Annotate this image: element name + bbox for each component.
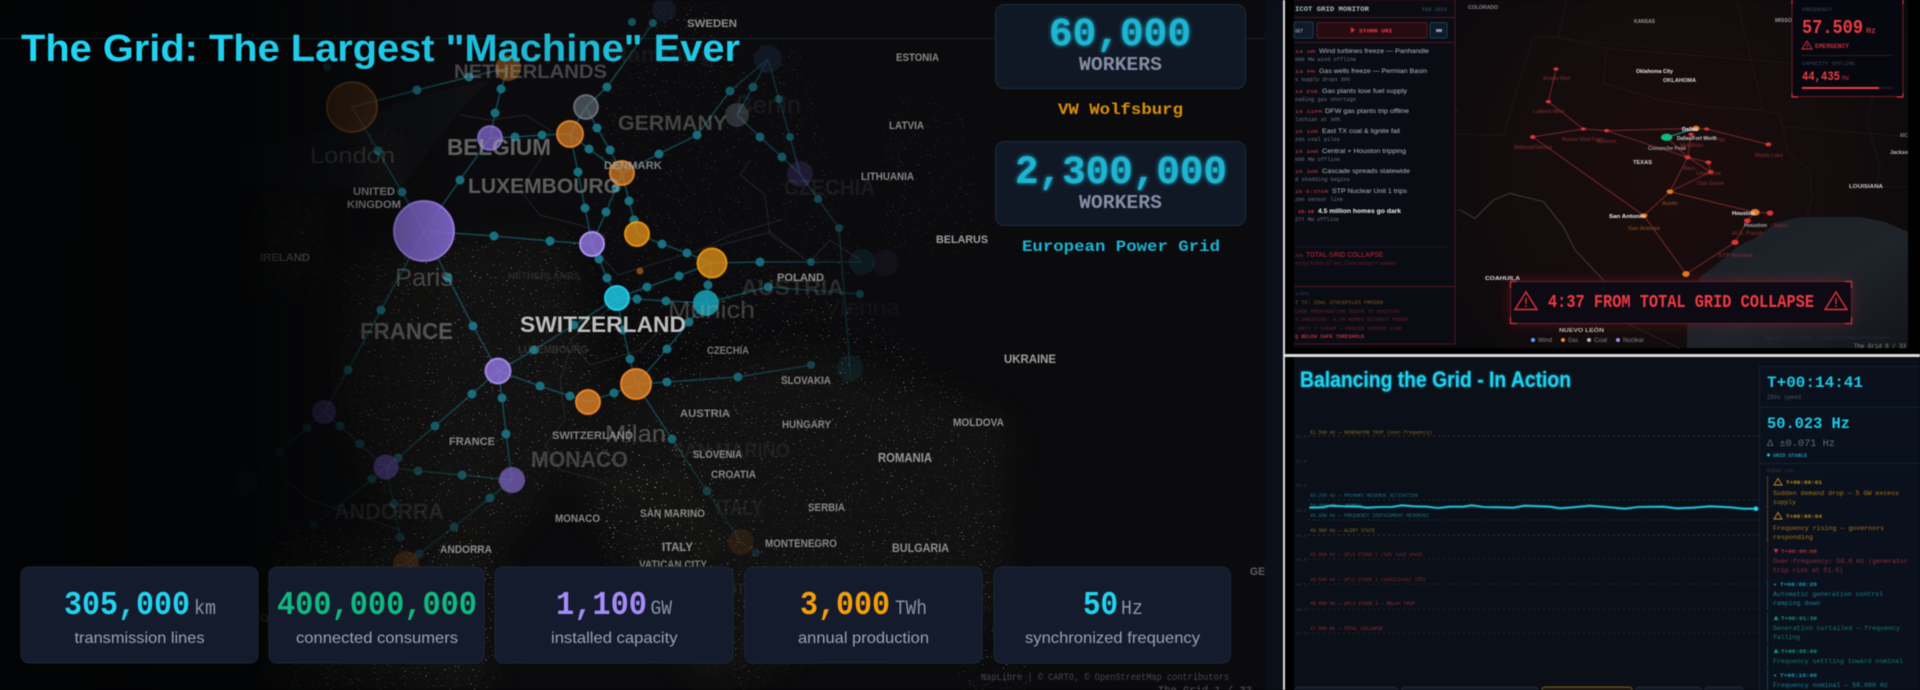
frequency deviation: Δ ±0.071 Hz — [1767, 438, 1835, 450]
map place labels: CZECHIA — [707, 345, 749, 357]
page counter: The Grid 6 / 33 — [1854, 343, 1906, 350]
title: The Grid: The Largest "Machine" Ever — [21, 28, 740, 70]
map place labels: ANDORRA — [440, 544, 492, 556]
event: frequency settling: Frequency settling toward nominal — [1773, 658, 1903, 665]
map labels: Houston — [1732, 211, 1756, 217]
label: workers: WORKERS — [1079, 54, 1162, 76]
map borders — [285, 115, 860, 530]
event log: EVENT LOG — [1767, 468, 1794, 474]
number: 2,300,000: 2,300,000 — [1015, 151, 1227, 196]
map place labels: SWEDEN — [687, 18, 737, 30]
frequency value: 57.509 — [1802, 17, 1863, 39]
attribution: MapLibre | © CARTO, © OpenStreetMap contributors — [1765, 334, 1890, 341]
stat card: connected consumers — [269, 567, 484, 663]
map water shading — [240, 80, 730, 560]
map labels: Oklahoma City — [1636, 69, 1674, 75]
event list: 4.5 million homes go dark — [1318, 208, 1401, 215]
threshold labels: 50.200 Hz — PRIMARY RESERVE ACTIVATION — [1310, 493, 1418, 499]
caption: European Power Grid: European Power Grid — [1022, 238, 1220, 256]
threshold labels: 49.500 Hz — ALERT STATE — [1310, 528, 1375, 534]
map place labels: ROMANIA — [878, 450, 933, 465]
map place labels: GERMANY — [618, 112, 727, 135]
event: over-frequency: trip risk at 51.5) — [1773, 567, 1843, 574]
legend: Coal — [1594, 338, 1607, 344]
grid status: GRID STABLE — [1773, 453, 1808, 459]
storm uri button: STORM URI — [1359, 28, 1393, 34]
skip button — [1430, 22, 1447, 38]
map place labels: CZECHIA — [784, 175, 875, 200]
caption: VW Wolfsburg: VW Wolfsburg — [1058, 101, 1183, 119]
sidebar system log: Q BELOW SAFE THRESHOLD — [1295, 334, 1364, 340]
plant labels: rgy — [1718, 137, 1725, 143]
event: AGC ramping: T+00:00:20 — [1780, 581, 1818, 588]
frequency trace — [1309, 505, 1758, 511]
axis labels: 49.0 — [1296, 557, 1307, 563]
event: demand drop: T+00:00:01 — [1786, 479, 1823, 486]
transmission network — [246, 18, 864, 579]
stat card: synchronized frequency — [994, 567, 1230, 663]
plant labels: r Bayou — [1771, 223, 1788, 229]
hub: Paris nuclear — [394, 201, 454, 261]
plant labels: STP Nuclear — [1718, 253, 1753, 259]
event: frequency rising — [1767, 510, 1884, 543]
night lights glow — [250, 130, 1010, 690]
event: frequency rising: responding — [1773, 534, 1813, 541]
threshold labels: 49.800 Hz — FREQUENCY CONTAINMENT RESERVES — [1310, 513, 1429, 519]
event list: 15 2AM — [1295, 149, 1318, 155]
plant labels: Limestone — [1696, 171, 1721, 177]
icon: warning left — [1515, 292, 1537, 310]
plant labels: Amarillo Wind — [1543, 76, 1570, 82]
map place labels: Vienna — [824, 295, 901, 320]
event: over-frequency: Over-frequency: 50.6 Hz (generator — [1773, 558, 1908, 565]
event: generation curtailed: falling — [1773, 634, 1800, 641]
event list: East TX coal & lignite fail — [1322, 128, 1401, 135]
event: frequency nominal: Frequency nominal — 50.000 Hz — [1773, 682, 1888, 689]
stat card: annual production: TWh — [895, 598, 927, 621]
event: AGC ramping: Automatic generation control — [1773, 591, 1883, 598]
map place labels: AUSTRIA — [680, 408, 730, 420]
sidebar system log — [1295, 292, 1408, 340]
map place labels: UNITED — [353, 186, 395, 198]
event: frequency rising: T+00:00:04 — [1786, 513, 1823, 520]
stat card: connected consumers: connected consumers — [296, 630, 458, 647]
map place labels: SLOVAKIA — [781, 375, 831, 387]
stat card: annual production: annual production — [798, 630, 929, 647]
panel: frequency readout: FREQUENCY — [1802, 7, 1832, 13]
event list: Wind turbines freeze — Panhandle — [1319, 48, 1429, 55]
map labels: MC — [1900, 133, 1908, 139]
bottom controls — [1295, 687, 1743, 690]
event list: zen sensor line — [1295, 197, 1343, 203]
sidebar system log: D SHEDDING: 4.5M HOMES WITHOUT POWER — [1295, 317, 1408, 323]
collapse event: ed by 4 min 37 sec. Cold restart = weeks. — [1295, 261, 1397, 267]
event log — [1767, 468, 1908, 690]
event: frequency settling — [1767, 645, 1903, 668]
map labels: Dallas/Fort Worth — [1677, 136, 1718, 142]
map place labels: Munich — [668, 297, 755, 324]
event list: 000 MW wind offline — [1295, 57, 1356, 63]
event list: DFW gas plants trip offline — [1325, 108, 1409, 115]
speed: 290x speed — [1767, 394, 1801, 401]
sidebar system log: CADE PROPAGATING SOUTH TO HOUSTON — [1295, 309, 1399, 315]
panel: European grid map — [0, 0, 1283, 690]
panel: frequency readout: CAPACITY OFFLINE — [1802, 61, 1855, 67]
stat card: synchronized frequency: Hz — [1121, 598, 1143, 621]
map place labels: FRANCE — [360, 318, 453, 344]
legend: Wind — [1538, 338, 1552, 344]
map place labels: IRELAND — [260, 252, 310, 264]
map labels: MISSO — [1775, 18, 1793, 24]
legend — [1531, 338, 1644, 344]
map place labels: Hamburg — [610, 42, 715, 67]
event list: STP Nuclear Unit 1 trips — [1332, 188, 1408, 195]
plant labels: Abilene — [1597, 139, 1616, 145]
sidebar system log: LOG — [1295, 292, 1310, 297]
corner brackets — [1792, 0, 1903, 97]
event list: 000 MW offline — [1295, 157, 1340, 163]
event list: 14 11PM — [1295, 109, 1322, 115]
panel: frequency readout: MW — [1842, 75, 1849, 82]
sidebar date: FEB 2021 — [1422, 7, 1447, 13]
panel: ERCOT grid monitor sidebar — [1294, 0, 1455, 344]
axis labels — [1296, 434, 1307, 637]
event list: 15-18 — [1298, 209, 1314, 215]
map place labels: LUXEMBOURG — [518, 344, 588, 356]
map place labels: VATICAN CITY — [639, 559, 708, 571]
event list — [1295, 48, 1429, 223]
panel: frequency readout — [1792, 0, 1903, 97]
offline capacity value: 44,435 — [1802, 70, 1840, 84]
ERCOT transmission network — [1530, 67, 1773, 277]
map labels: Houston — [1744, 223, 1768, 229]
map labels: Dallas — [1682, 127, 1698, 133]
map place labels: NETHERLANDS — [454, 62, 607, 83]
map place labels: BELARUS — [936, 234, 988, 246]
map labels: Comanche Peak — [1648, 146, 1687, 152]
stat card: transmission lines: transmission lines — [74, 630, 204, 647]
threshold labels: 47.500 Hz — TOTAL COLLAPSE — [1310, 626, 1383, 632]
stat card: annual production — [745, 567, 982, 663]
panel dividers — [1283, 0, 1920, 690]
title rule — [0, 38, 1265, 39]
night lights dots — [250, 0, 1040, 690]
stat card: installed capacity: installed capacity — [551, 630, 678, 647]
threshold labels: 48.000 Hz — UFLS STAGE 3 — RELAY TRIP — [1310, 601, 1415, 607]
event list: lothian at 30% — [1295, 117, 1340, 123]
plant labels: Martin Lake — [1755, 153, 1783, 159]
banner text: 4:37 FROM TOTAL GRID COLLAPSE — [1548, 293, 1814, 313]
map labels: TEXAS — [1633, 160, 1652, 166]
stat card: synchronized frequency: 50 — [1083, 587, 1118, 624]
plant labels: Midlothian — [1680, 143, 1703, 149]
panel: Texas grid collapse map — [1294, 0, 1909, 350]
map place labels: MONACO — [555, 513, 600, 525]
map labels: KANSAS — [1634, 19, 1655, 25]
map place labels: MOLDOVA — [953, 417, 1004, 429]
map labels: OKLAHOMA — [1663, 78, 1696, 84]
stat card: installed capacity — [495, 567, 733, 663]
event: frequency nominal — [1767, 669, 1888, 690]
number: 60,000: 60,000 — [1049, 13, 1191, 58]
map place labels: KINGDOM — [347, 199, 401, 211]
event list: Central + Houston tripping — [1322, 148, 1406, 155]
power lines — [1533, 69, 1770, 274]
collapse event — [1295, 252, 1397, 267]
map labels: NUEVO LEÓN — [1559, 326, 1604, 334]
stat card: connected consumers: 400,000,000 — [277, 587, 477, 624]
map place labels: Paris — [395, 264, 453, 292]
threshold labels: 51.500 Hz — GENERATOR TRIP (over-frequency) — [1310, 430, 1432, 436]
panel: balancing the grid — [1294, 357, 1920, 690]
map labels: San Antonio — [1609, 214, 1646, 220]
cyan active tie — [1667, 128, 1696, 137]
stat card: installed capacity: 1,100 — [556, 587, 647, 624]
map place labels: MONACO — [531, 447, 628, 472]
reset button: SET — [1295, 28, 1304, 34]
reset button — [1294, 22, 1313, 38]
attribution: MapLibre | © CARTO, © OpenStreetMap contributors — [981, 672, 1229, 684]
event: demand drop: Sudden demand drop — 5 GW excess — [1773, 490, 1899, 497]
stat card: transmission lines: 305,000 — [64, 587, 190, 624]
left fog overlay — [0, 0, 1265, 690]
event list: Gas wells freeze — Permian Basin — [1319, 68, 1427, 75]
map place labels: SWITZERLAND — [552, 430, 633, 442]
event list: 15 1AM — [1295, 129, 1318, 135]
threshold labels — [1310, 430, 1432, 632]
plant labels: Lubbock Wind — [1533, 109, 1564, 115]
event: frequency rising: Frequency rising — governors — [1773, 525, 1884, 532]
emergency status: EMERGENCY — [1815, 43, 1849, 50]
stat card: installed capacity: GW — [650, 598, 672, 621]
axis labels: 47.5 — [1296, 631, 1307, 637]
heading: Balancing the Grid - In Action — [1300, 367, 1571, 392]
event list: oading gas shortage — [1295, 97, 1356, 103]
callout: collapse countdown banner — [1510, 281, 1852, 324]
map labels: Jackso — [1890, 150, 1909, 156]
collapse event: AM — [1295, 253, 1303, 259]
sidebar system log: UNIT 1 SCRAM — FROZEN SENSOR LINE — [1298, 326, 1402, 332]
event: demand drop: supply — [1773, 499, 1796, 506]
axis labels: 48.0 — [1296, 607, 1307, 613]
substation nodes — [276, 18, 864, 579]
map place labels: Rome — [707, 575, 760, 600]
map place labels: Milan — [605, 421, 666, 448]
map place labels: MONTENEGRO — [765, 538, 837, 550]
event: frequency nominal: T+00:10:00 — [1780, 672, 1818, 679]
event: AGC ramping — [1767, 578, 1883, 610]
live frequency: 50.023 Hz — [1767, 415, 1850, 433]
panel: European grid workers comparison — [996, 142, 1246, 256]
hub: London gas — [327, 82, 377, 132]
map place labels: UKRAINE — [1004, 352, 1056, 366]
map place labels: BULGARIA — [892, 541, 949, 555]
card: 60,000 workers — [996, 4, 1246, 88]
map place labels: LITHUANIA — [861, 171, 914, 183]
map labels: LOUISIANA — [1849, 184, 1883, 190]
event: generation curtailed: Generation curtailed — frequency — [1773, 625, 1900, 632]
map place labels: NETHERLANDS — [508, 271, 580, 281]
map place labels: LUXEMBOURG — [468, 175, 620, 198]
stat card: transmission lines — [21, 567, 258, 663]
event: AGC ramping: ramping down — [1773, 600, 1820, 607]
event list: 277 MW offline — [1295, 217, 1339, 223]
map place labels: ITALY — [716, 495, 763, 520]
axis labels: 50.0 — [1296, 508, 1307, 514]
legend: Nuclear — [1623, 338, 1644, 344]
map place labels: HUNGARY — [782, 419, 832, 431]
event: frequency settling: T+00:05:00 — [1781, 648, 1818, 655]
sidebar system log: T TX: COAL STOCKPILES FROZEN — [1295, 300, 1383, 306]
event list: 15 3AM — [1295, 169, 1318, 175]
map labels: COAHUILA — [1485, 276, 1520, 282]
plant labels: San Antonio — [1628, 226, 1660, 232]
map place labels: London — [310, 143, 395, 168]
map place labels: ANDORRA — [334, 499, 444, 524]
map place labels: Berlin — [736, 92, 801, 119]
frequency chart — [1296, 430, 1760, 637]
event list: Gas plants lose fuel supply — [1322, 88, 1408, 95]
map place labels: SWITZERLAND — [520, 312, 686, 337]
storm uri button — [1317, 22, 1427, 38]
map place labels: SLOVENIA — [693, 449, 742, 461]
stat card: annual production: 3,000 — [800, 587, 890, 624]
map place labels: ITALY — [662, 540, 693, 554]
panel: simulation sidebar — [1760, 366, 1920, 690]
map place labels: GE — [1250, 566, 1265, 578]
axis labels: 51.0 — [1296, 459, 1307, 465]
power plant hubs — [234, 0, 898, 577]
plant labels: Austin — [1662, 201, 1678, 207]
map labels — [1468, 5, 1909, 334]
plant labels — [1514, 76, 1788, 259]
event list: s supply drops 50% — [1295, 77, 1350, 83]
transmission lines — [312, 26, 862, 566]
state borders and rivers — [1353, 0, 1908, 348]
map place labels: ESTONIA — [896, 52, 939, 64]
threshold lines — [1308, 436, 1760, 633]
axis labels: 48.5 — [1296, 582, 1307, 588]
map place labels: SERBIA — [808, 502, 845, 514]
gulf of Mexico — [1687, 217, 1908, 348]
stat card: synchronized frequency: synchronized frequency — [1025, 630, 1200, 647]
map place labels: FRANCE — [449, 436, 495, 448]
plant labels: Roscoe Wind Farm — [1562, 137, 1603, 143]
event list: 14 EVE — [1295, 89, 1318, 95]
legend: Gas — [1568, 338, 1578, 344]
plant labels: Midland/Odessa — [1514, 145, 1552, 151]
icon: warning — [1802, 41, 1812, 49]
map place labels: CROATIA — [711, 469, 756, 481]
event list: 14 AM — [1295, 49, 1315, 55]
event list: d shedding begins — [1295, 177, 1350, 183]
event: generation curtailed: T+00:01:30 — [1781, 615, 1818, 622]
map labels: COLORADO — [1468, 5, 1499, 11]
map place labels: O — [260, 613, 269, 625]
collapse event: TOTAL GRID COLLAPSE — [1306, 252, 1383, 259]
event: over-frequency: T+00:00:08 — [1781, 548, 1818, 555]
capacity bar — [1802, 87, 1893, 89]
stat card: transmission lines: km — [194, 598, 216, 621]
event: over-frequency — [1767, 545, 1908, 577]
event list: 14 PM — [1295, 69, 1315, 75]
event: generation curtailed — [1767, 612, 1900, 643]
plant labels: W.A. Parish — [1732, 231, 1763, 237]
active green plant — [1661, 134, 1672, 141]
axis labels: 49.5 — [1296, 533, 1307, 539]
event: demand drop — [1767, 476, 1899, 509]
axis labels: 51.5 — [1296, 434, 1307, 440]
card: 2,300,000 workers — [996, 142, 1246, 226]
icon: warning right — [1825, 292, 1847, 310]
map place labels: AUSTRIA — [741, 275, 844, 300]
map place labels: SAN MARINO — [672, 440, 790, 462]
map place labels: DENMARK — [604, 160, 662, 172]
plant labels: Waco — [1683, 166, 1695, 172]
simulation clock: T+00:14:41 — [1767, 374, 1863, 392]
threshold labels: 50.000 Hz — NORMAL — [1310, 503, 1363, 509]
plant markers — [1530, 67, 1773, 245]
map place labels: LATVIA — [889, 120, 924, 132]
sidebar header: ICOT GRID MONITOR — [1295, 6, 1369, 13]
other hubs — [234, 0, 898, 577]
event list: 15 5:37AM — [1295, 189, 1328, 195]
map place labels: SAN MARINO — [640, 508, 705, 520]
threshold labels: 49.000 Hz — UFLS STAGE 1 (10% load shed) — [1310, 552, 1423, 558]
map place labels — [260, 18, 1265, 625]
panel: frequency readout: Hz — [1866, 27, 1876, 36]
map place labels: BELGIUM — [447, 134, 551, 160]
panel: VW workers comparison — [996, 4, 1246, 119]
label: workers: WORKERS — [1079, 192, 1162, 214]
axis labels: 50.5 — [1296, 483, 1307, 489]
plant labels: Oak Grove — [1697, 181, 1724, 187]
threshold labels: 48.500 Hz — UFLS STAGE 2 (additional 15%) — [1310, 577, 1426, 583]
map place labels: POLAND — [777, 272, 824, 284]
event list: zen coal piles — [1295, 137, 1340, 143]
event list: Cascade spreads statewide — [1322, 168, 1410, 175]
